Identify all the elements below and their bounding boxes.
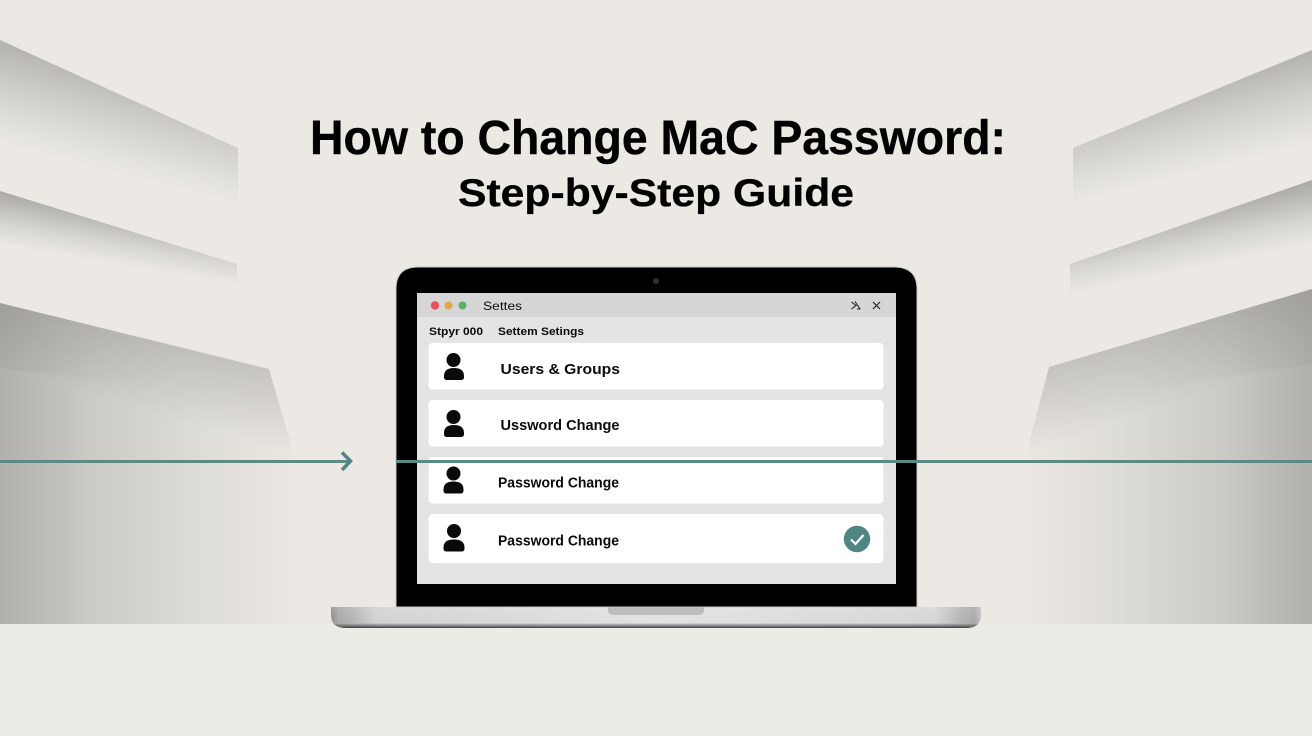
right wall lower panel	[1010, 289, 1312, 624]
right lower band shadow edge	[1142, 289, 1312, 390]
icon: user	[444, 353, 464, 380]
icon: user	[444, 466, 464, 494]
left lower band shadow edge	[0, 303, 170, 387]
row label: Users & Groups	[500, 361, 620, 378]
arrowhead	[342, 452, 350, 470]
window control: zoom	[458, 302, 466, 310]
icon: user	[444, 410, 464, 437]
camera	[653, 278, 659, 284]
row: users and groups	[428, 343, 884, 390]
laptop base	[331, 607, 981, 628]
row: password change complete	[428, 514, 884, 563]
left upper band	[0, 40, 238, 206]
right upper band	[1073, 50, 1312, 206]
laptop bezel	[396, 267, 917, 607]
right architectural wall	[1010, 50, 1312, 624]
left architectural wall	[0, 40, 310, 624]
icon: user	[444, 524, 464, 552]
laptop	[331, 267, 981, 628]
title	[310, 112, 1006, 215]
window body	[417, 293, 896, 584]
right middle band	[1070, 180, 1312, 296]
row label: Password Change	[498, 534, 619, 550]
section label: Settem Setings	[498, 326, 584, 338]
window control: minimise	[444, 302, 452, 310]
floor	[0, 624, 1312, 736]
settings window	[417, 293, 896, 584]
row label: Ussword Change	[500, 418, 620, 434]
row label: Password Change	[498, 476, 619, 492]
breadcrumb: Stpyr 000	[429, 326, 483, 338]
window control: close	[431, 301, 439, 310]
title line 1: How to Change MaC Password:	[310, 112, 1006, 165]
icon: close x	[873, 302, 880, 309]
left middle band	[0, 191, 237, 285]
row: password change	[428, 457, 884, 504]
arrow: guide line entering laptop	[0, 452, 350, 470]
guide line across laptop	[396, 460, 1312, 463]
left wall lower panel	[0, 303, 310, 624]
left lower band	[0, 303, 294, 455]
row: ussword change	[428, 400, 884, 446]
window title: Settes	[483, 299, 522, 313]
title line 2: Step-by-Step Guide	[458, 172, 854, 215]
right lower band	[1026, 289, 1312, 455]
icon: check badge	[844, 526, 870, 552]
title bar	[417, 293, 896, 317]
icon: toolbar shuffle	[852, 302, 860, 309]
trackpad notch	[608, 607, 704, 615]
